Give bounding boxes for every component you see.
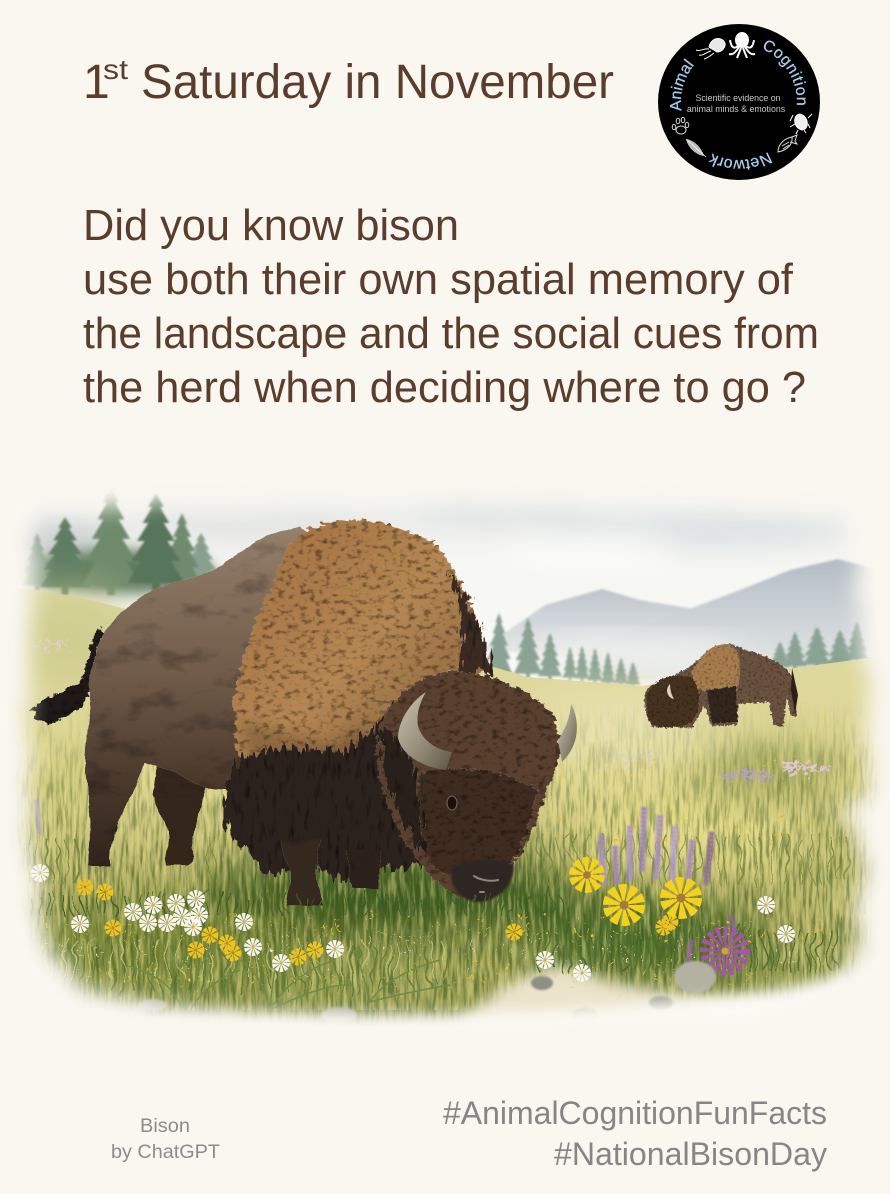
logo ring text: Cognition [764, 40, 806, 105]
yellow daisies [578, 866, 692, 916]
main question text [83, 201, 819, 412]
eye [447, 796, 457, 810]
far horn [558, 704, 577, 762]
icon: jellyfish [696, 38, 725, 59]
icon: feather [686, 139, 706, 157]
illustration: bison in meadow [12, 492, 883, 1024]
dark rear edge of cape [448, 570, 494, 678]
white daisies [35, 868, 791, 978]
hashtags: #NationalBisonDay [554, 1136, 827, 1172]
main bison [28, 520, 577, 906]
lower shoulder mane [224, 695, 440, 882]
distant pines [486, 613, 869, 687]
logo ring text [670, 40, 806, 170]
hashtags [443, 1095, 827, 1172]
main question text: Did you know bison [83, 201, 459, 250]
main question text: the landscape and the social cues from [83, 309, 819, 358]
pine trees, left [22, 487, 219, 595]
main question text: the herd when deciding where to go ? [83, 363, 806, 412]
near hind leg and rump [85, 525, 400, 866]
main question text: use both their own spatial memory of [83, 255, 794, 304]
muzzle [451, 860, 514, 902]
soft lower fade [120, 967, 855, 1040]
date heading: st [103, 54, 128, 85]
icon: beetle [790, 112, 812, 134]
date heading: Saturday in November [141, 56, 614, 109]
cape shadow under shoulder [238, 718, 371, 758]
logo ring text: Animal [670, 58, 694, 111]
nostril highlight [474, 876, 498, 892]
caption: image credit [111, 1116, 220, 1163]
logo tagline [687, 93, 786, 114]
meadow ground [0, 586, 890, 1060]
distant bison [645, 644, 798, 728]
tail [28, 628, 104, 723]
dirt path [462, 956, 758, 1022]
yellow and pale speck flowers [40, 770, 860, 975]
icon: fish [778, 135, 797, 152]
logo ring text: Network [708, 152, 772, 170]
grass tufts [124, 945, 450, 1012]
logo tagline: animal minds & emotions [687, 104, 786, 114]
lavender spikes [36, 800, 736, 968]
near horn [398, 692, 452, 770]
head [376, 672, 560, 900]
icon: octopus [729, 33, 755, 58]
caption: image credit: Bison [140, 1116, 190, 1137]
mountains [480, 559, 880, 680]
dark neck fold behind horn [378, 730, 428, 860]
rocks [139, 961, 716, 1023]
sky [24, 498, 848, 562]
dark face [418, 769, 538, 876]
shoulder cape [233, 520, 490, 780]
foreground grass over hooves [30, 860, 860, 1022]
far hind leg [153, 760, 205, 866]
grass texture [10, 700, 880, 1030]
hashtags: #AnimalCognitionFunFacts [443, 1095, 827, 1131]
purple aster [712, 938, 738, 964]
logo: Animal Cognition Network badge [658, 24, 820, 180]
date heading: 1 [83, 56, 110, 109]
pink flower clumps [34, 645, 830, 775]
front legs [280, 840, 322, 906]
logo tagline: Scientific evidence on [695, 93, 781, 103]
caption: image credit: by ChatGPT [111, 1142, 220, 1163]
small yellow flowers [80, 882, 674, 962]
icon: paw [672, 117, 689, 134]
